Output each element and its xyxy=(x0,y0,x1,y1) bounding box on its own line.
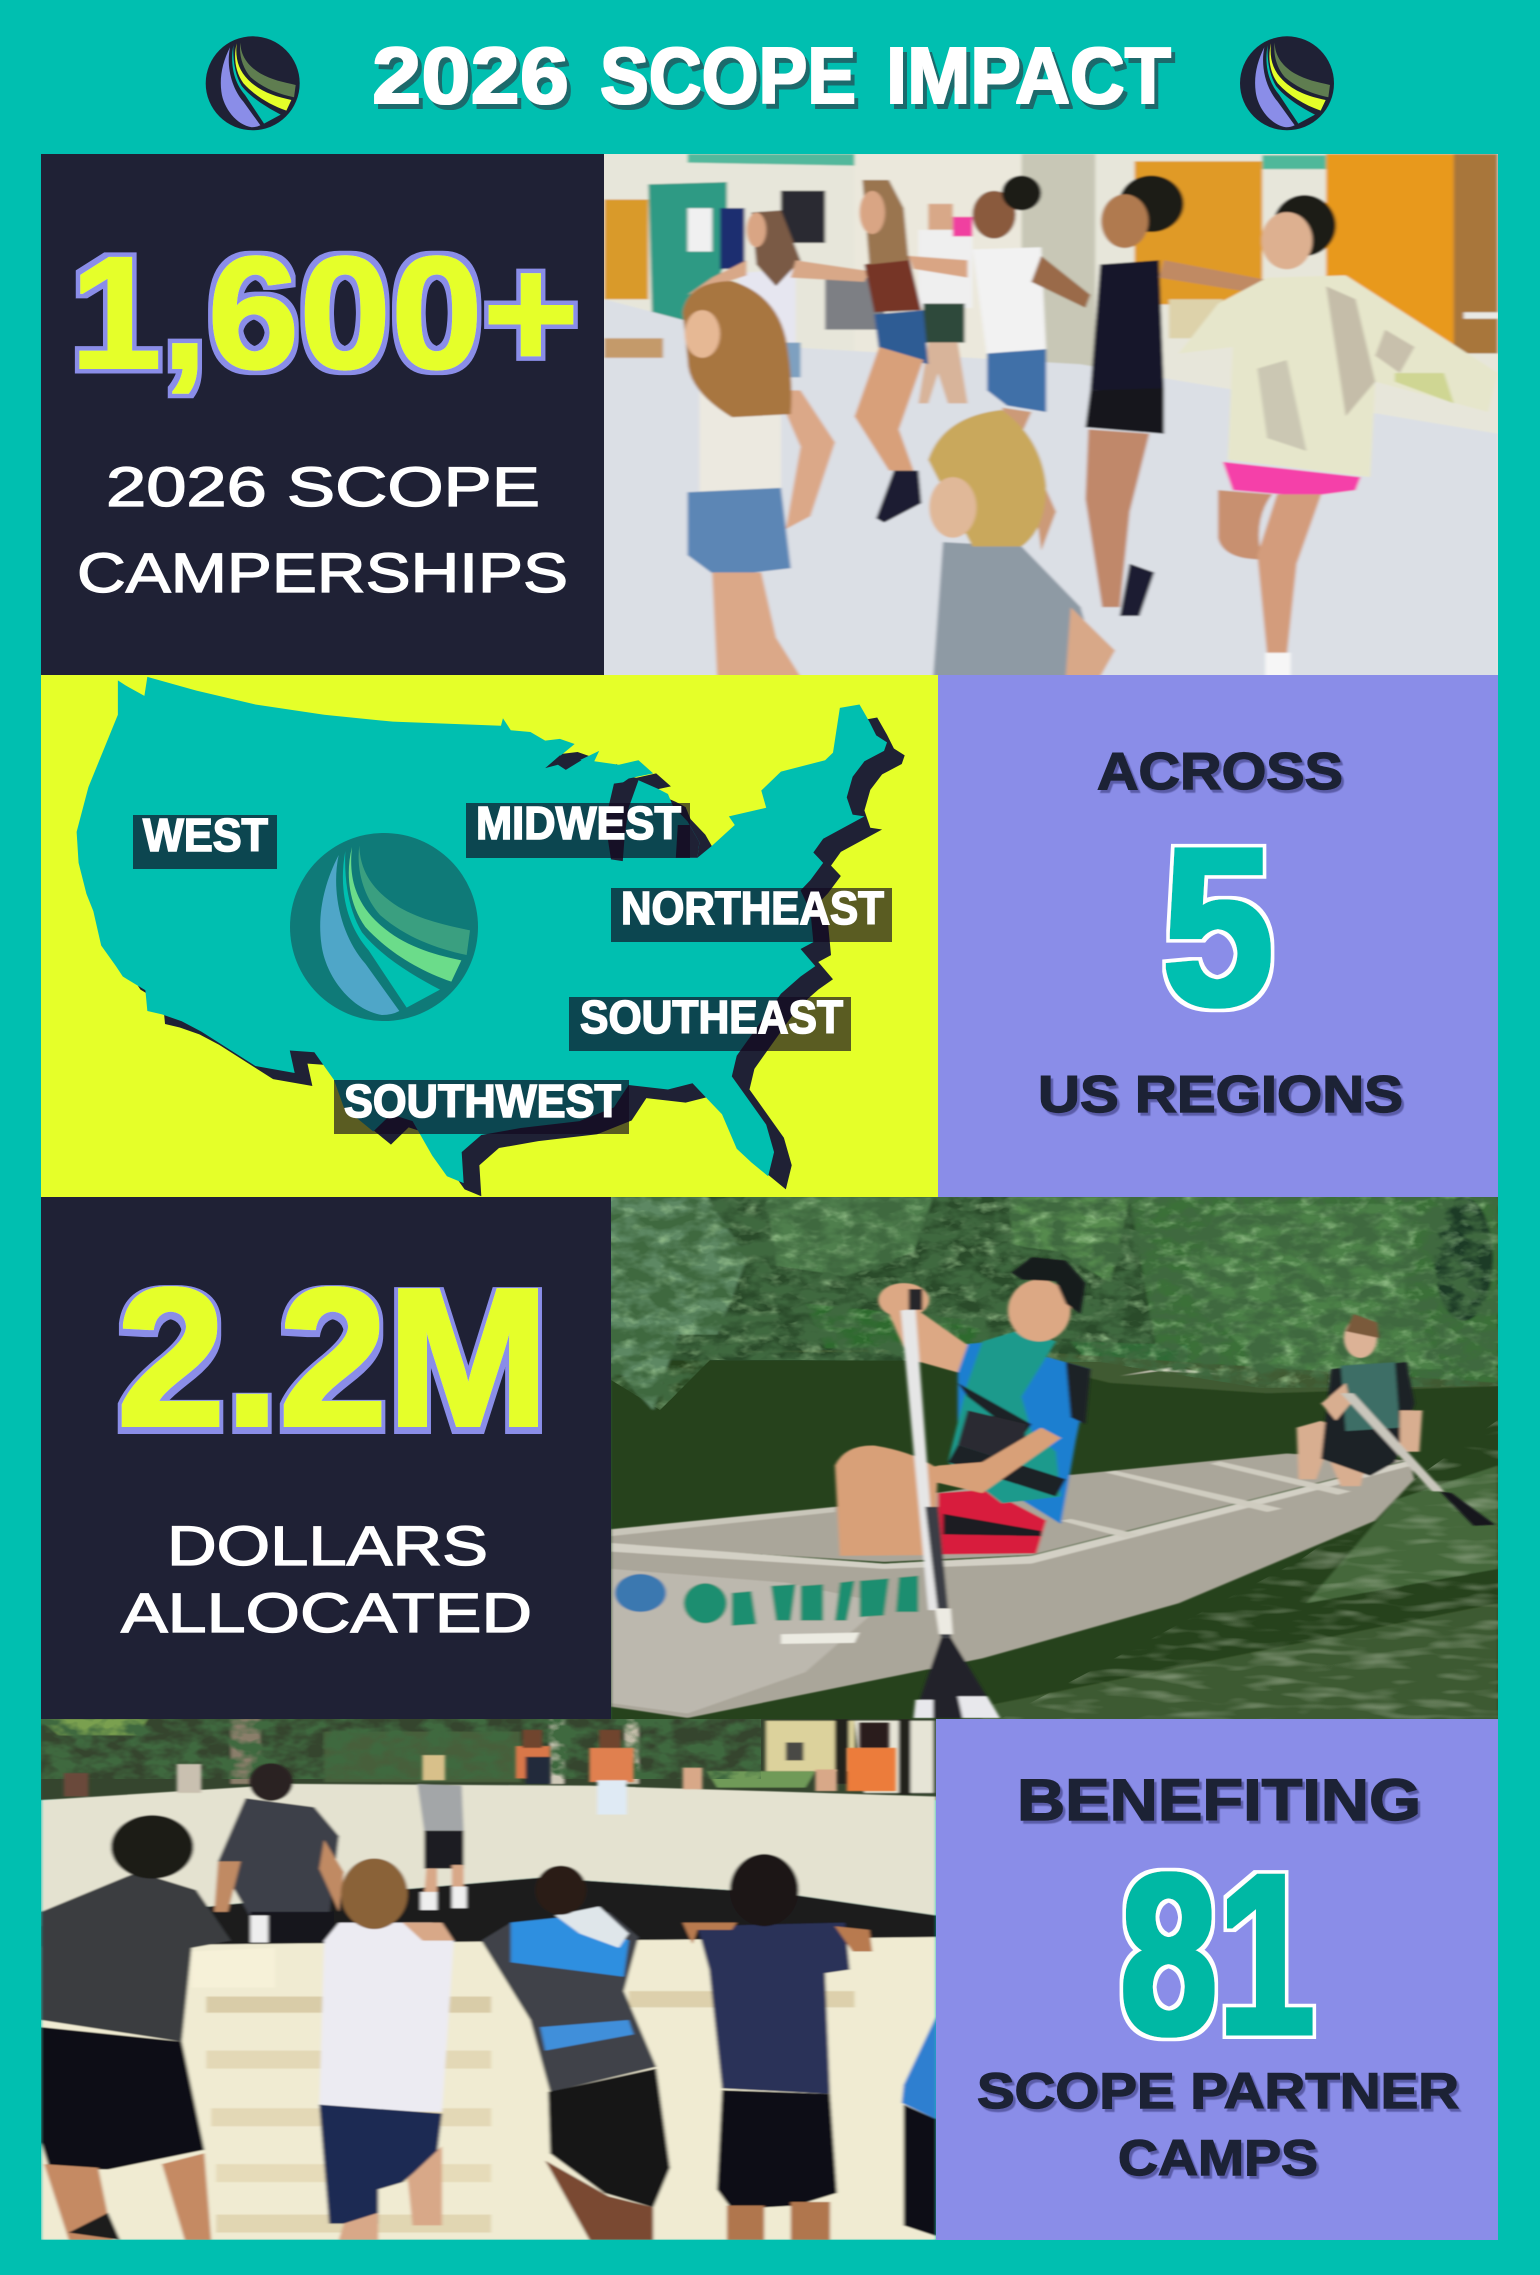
label: WEST: WEST xyxy=(143,809,268,861)
great lakes shadows xyxy=(545,755,699,861)
player in white shirt xyxy=(319,1923,454,2112)
text: CAMPERSHIPS: CAMPERSHIPS xyxy=(77,541,568,604)
text: BENEFITING: BENEFITING xyxy=(1017,1768,1421,1833)
text: DOLLARS: DOLLARS xyxy=(167,1514,488,1577)
boy with paddle xyxy=(835,1446,938,1556)
foliage texture xyxy=(611,1197,1498,1412)
pit floor xyxy=(206,1877,936,1945)
dancer tie-dye top xyxy=(1273,195,1336,256)
label: SOUTHWEST: SOUTHWEST xyxy=(344,1075,621,1127)
title: 2026 xyxy=(372,31,569,120)
stat: 2.2M: 2.2M xyxy=(117,1248,549,1467)
canoe thwarts xyxy=(1105,1471,1282,1512)
player in hoodie xyxy=(481,1912,656,2092)
panel: camperships stat xyxy=(41,154,604,675)
dancer black tank xyxy=(1119,176,1184,232)
photo: dancers in studio xyxy=(599,152,1503,677)
second boy xyxy=(1297,1421,1370,1486)
dancer long hair white tank xyxy=(737,269,796,347)
panel: US regions map xyxy=(41,675,938,1197)
text: SCOPE PARTNER: SCOPE PARTNER xyxy=(977,2063,1459,2119)
background man xyxy=(928,204,953,230)
title: IMPACT xyxy=(886,31,1171,120)
panel: dollars stat xyxy=(41,1197,611,1719)
text: US REGIONS: US REGIONS xyxy=(1038,1066,1403,1124)
back wall xyxy=(41,1784,936,1926)
text: CAMPS: CAMPS xyxy=(1118,2130,1318,2186)
icon: left SCOPE logo xyxy=(206,36,300,130)
paddle xyxy=(901,1309,938,1610)
spectators xyxy=(64,1723,896,1815)
photo: campers at gaga pit xyxy=(39,1717,938,2240)
tree texture xyxy=(41,1719,761,1779)
title xyxy=(372,31,1171,120)
front wall xyxy=(41,1937,936,2240)
icon: map center logo xyxy=(290,833,478,1021)
photo: campers in canoe xyxy=(609,1195,1503,1720)
stat: 5: 5 xyxy=(1162,802,1274,1052)
icon: right SCOPE logo xyxy=(1240,36,1334,130)
label: SOUTHEAST: SOUTHEAST xyxy=(580,991,843,1043)
text: ACROSS: ACROSS xyxy=(1097,743,1343,801)
left player xyxy=(41,1872,231,2042)
panel: partner camps stat xyxy=(936,1719,1498,2240)
player in navy shirt xyxy=(697,1923,850,2094)
canoe hull xyxy=(611,1460,1415,1718)
title: SCOPE xyxy=(600,31,856,120)
boy foreground center xyxy=(933,542,1100,677)
canoe lettering xyxy=(684,1576,918,1626)
water ripples xyxy=(1000,1420,1498,1719)
stat: 81: 81 xyxy=(1120,1828,1315,2082)
map shadow xyxy=(138,718,905,1196)
player at right edge xyxy=(902,2016,936,2119)
far player xyxy=(417,1784,464,1832)
text: 2026 SCOPE: 2026 SCOPE xyxy=(106,455,540,518)
stat: 1,600+: 1,600+ xyxy=(70,223,579,402)
text: ALLOCATED: ALLOCATED xyxy=(121,1581,532,1644)
player in grey back xyxy=(218,1798,339,1917)
panel: regions stat xyxy=(938,675,1498,1197)
dancer white tee xyxy=(972,247,1046,358)
label: MIDWEST: MIDWEST xyxy=(476,797,681,849)
map of the United States xyxy=(77,677,887,1183)
label: NORTHEAST: NORTHEAST xyxy=(621,882,884,934)
canoe interior xyxy=(611,1453,1407,1562)
dancer red top xyxy=(864,256,921,312)
girl foreground left xyxy=(700,393,781,492)
